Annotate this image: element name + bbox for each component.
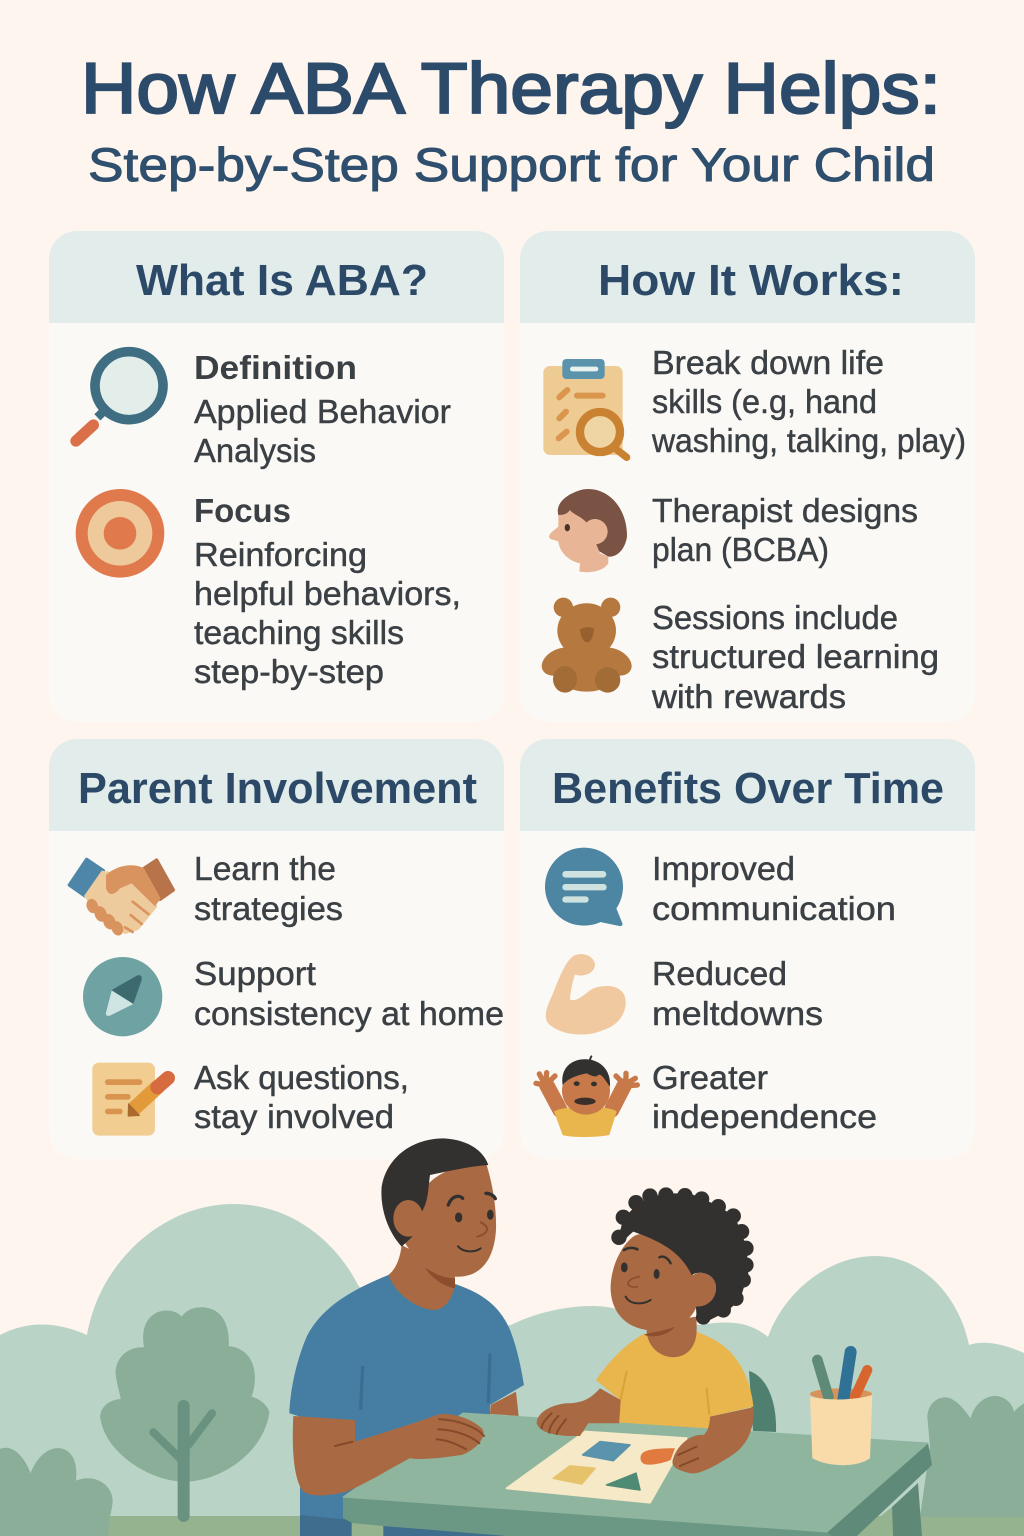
parent involvement text: stay involved bbox=[194, 1098, 394, 1135]
panel: What Is ABA? bbox=[49, 231, 504, 722]
title: Step-by-Step Support for Your Child bbox=[88, 138, 935, 191]
benefits text bbox=[652, 850, 896, 1135]
boy right arm bbox=[672, 1407, 753, 1473]
man figure bbox=[293, 1138, 496, 1495]
table ground gap bbox=[856, 1507, 894, 1536]
focus text: teaching skills bbox=[194, 614, 404, 651]
icon: teddy bear bbox=[537, 598, 636, 693]
panel: Parent Involvement bbox=[49, 739, 504, 1159]
how it works text: Break down life bbox=[652, 344, 884, 381]
icon: child with raised arms bbox=[536, 1056, 637, 1137]
man arm and hand bbox=[293, 1414, 484, 1495]
focus text: Reinforcing bbox=[194, 536, 367, 573]
man face bbox=[448, 1193, 495, 1251]
definition text: Definition bbox=[194, 349, 357, 386]
definition text: Applied Behavior bbox=[194, 393, 451, 430]
icon: compass bbox=[83, 957, 162, 1036]
how it works text: washing, talking, play) bbox=[651, 422, 966, 459]
boy neck bbox=[647, 1317, 697, 1357]
how it works text: skills (e.g, hand bbox=[652, 383, 877, 420]
benefits text: meltdowns bbox=[652, 995, 823, 1032]
how it works text: structured learning bbox=[652, 638, 939, 675]
icon: flexed arm bbox=[546, 954, 626, 1034]
man head bbox=[402, 1165, 496, 1277]
benefits text: Greater bbox=[652, 1059, 768, 1096]
parent involvement text: Support bbox=[194, 955, 316, 992]
icon: therapist head bbox=[549, 489, 627, 572]
icon: clipboard with magnifier bbox=[543, 359, 627, 457]
focus text: Focus bbox=[194, 492, 291, 529]
how it works text bbox=[651, 344, 966, 715]
boy torso bbox=[596, 1332, 753, 1430]
tree bbox=[100, 1307, 269, 1516]
table top bbox=[343, 1413, 928, 1532]
panel: How It Works: How It Works: bbox=[598, 256, 904, 305]
how it works text: with rewards bbox=[651, 678, 846, 715]
title: How ABA Therapy Helps: bbox=[81, 50, 941, 129]
boy face bbox=[624, 1248, 671, 1303]
icon: speech bubble bbox=[545, 848, 623, 926]
pencil cup bbox=[810, 1352, 872, 1465]
boy head bbox=[611, 1234, 716, 1331]
boy figure bbox=[537, 1187, 754, 1473]
panel: How It Works bbox=[520, 231, 975, 722]
background hills bbox=[0, 1204, 1024, 1516]
table leg bbox=[892, 1483, 922, 1536]
icon: magnifying glass bbox=[76, 352, 163, 441]
man hair bbox=[381, 1138, 488, 1247]
how it works text: Therapist designs bbox=[652, 492, 918, 529]
focus text: step-by-step bbox=[194, 653, 384, 690]
table front face bbox=[343, 1443, 932, 1536]
panel: Benefits Over Time: Benefits Over Time bbox=[552, 764, 944, 813]
benefits text: communication bbox=[652, 890, 896, 927]
puzzle board bbox=[507, 1432, 687, 1503]
benefits text: Reduced bbox=[652, 955, 787, 992]
panel: Benefits Over Time bbox=[520, 739, 975, 1159]
panel: Parent Involvement: Parent Involvement bbox=[78, 764, 477, 813]
benefits text: Improved bbox=[652, 850, 795, 887]
definition text bbox=[194, 349, 451, 469]
parent involvement text: Learn the bbox=[194, 850, 336, 887]
definition text: Analysis bbox=[194, 432, 316, 469]
focus text: helpful behaviors, bbox=[194, 575, 461, 612]
ground bbox=[0, 1516, 1024, 1536]
chair bbox=[749, 1371, 776, 1432]
title bbox=[81, 50, 941, 191]
focus text bbox=[194, 492, 461, 690]
left bush bbox=[0, 1448, 113, 1536]
icon: handshake bbox=[69, 859, 173, 937]
parent involvement text: consistency at home bbox=[194, 995, 504, 1032]
man neck bbox=[388, 1245, 455, 1310]
icon: note and pencil bbox=[92, 1063, 168, 1136]
icon: target bbox=[76, 489, 164, 578]
parent involvement text bbox=[194, 850, 504, 1135]
right bush bbox=[920, 1396, 1024, 1536]
how it works text: Sessions include bbox=[652, 599, 898, 636]
parent involvement text: strategies bbox=[194, 890, 343, 927]
boy left arm bbox=[537, 1388, 621, 1436]
man ear bbox=[393, 1200, 423, 1237]
illustration: parent and child at table bbox=[0, 1138, 1024, 1536]
table side face bbox=[827, 1443, 932, 1536]
how it works text: plan (BCBA) bbox=[652, 531, 829, 568]
table bbox=[343, 1413, 932, 1536]
man torso bbox=[289, 1275, 524, 1536]
boy hair bbox=[611, 1187, 754, 1325]
parent involvement text: Ask questions, bbox=[194, 1059, 409, 1096]
panel: What Is ABA?: What Is ABA? bbox=[136, 256, 428, 305]
benefits text: independence bbox=[652, 1098, 877, 1135]
